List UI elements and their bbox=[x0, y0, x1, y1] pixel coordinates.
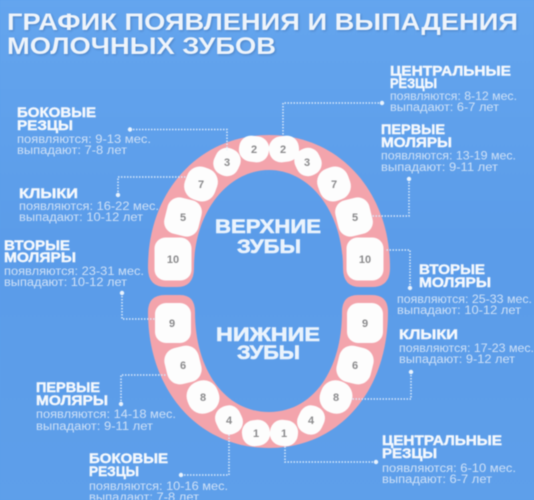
tooth numbers: 3 bbox=[224, 157, 230, 169]
tooth numbers: 6 bbox=[352, 360, 358, 372]
text block: upper lateral incisors: выпадают: 7-8 лет bbox=[17, 145, 128, 157]
text block: right second molars: ВТОРЫЕ bbox=[419, 262, 485, 277]
connector: lower second molars bbox=[120, 291, 155, 319]
text block: lower central incisors: выпадают: 6-7 лет bbox=[382, 474, 493, 486]
tooth numbers: 8 bbox=[200, 392, 206, 404]
label: upper teeth: ВЕРХНИЕ bbox=[215, 216, 321, 238]
text block: lower canines: появляются: 17-23 мес. bbox=[399, 343, 534, 355]
tooth numbers: 4 bbox=[226, 415, 233, 427]
text block: lower central incisors: ЦЕНТРАЛЬНЫЕ bbox=[382, 433, 502, 448]
title bbox=[7, 9, 518, 60]
tooth numbers: 4 bbox=[308, 415, 315, 427]
text block: upper central incisors: РЕЗЦЫ bbox=[390, 76, 437, 91]
tooth numbers: 9 bbox=[362, 318, 368, 330]
text block: upper first molars: ПЕРВЫЕ bbox=[381, 122, 445, 137]
upper gum bbox=[148, 135, 390, 287]
text block: lower lateral incisors: РЕЗЦЫ bbox=[89, 464, 139, 479]
tooth numbers: 7 bbox=[198, 179, 204, 191]
tooth numbers: 5 bbox=[180, 212, 186, 224]
tooth numbers: 7 bbox=[331, 179, 337, 191]
tooth numbers bbox=[167, 144, 371, 440]
text block: left second molars: выпадают: 10-12 лет bbox=[4, 277, 128, 289]
text block: lower central incisors bbox=[382, 433, 516, 486]
text block: upper first molars: МОЛЯРЫ bbox=[381, 135, 452, 150]
text block: lower first molars: МОЛЯРЫ bbox=[36, 393, 108, 408]
lower gum bbox=[148, 295, 388, 448]
upper teeth bbox=[154, 134, 384, 280]
connector: lower canines bbox=[352, 370, 413, 399]
tooth numbers: 1 bbox=[253, 428, 259, 440]
connector: lower first molars bbox=[119, 375, 167, 406]
text block: left second molars: появляются: 23-31 мес. bbox=[4, 266, 144, 278]
title: ГРАФИК ПОЯВЛЕНИЯ И ВЫПАДЕНИЯ bbox=[7, 9, 518, 36]
label: lower teeth: НИЖНИЕ bbox=[216, 324, 320, 346]
text block: lower first molars: появляются: 14-18 мес. bbox=[36, 409, 176, 421]
tooth numbers: 2 bbox=[280, 144, 286, 156]
label: upper teeth bbox=[215, 216, 321, 258]
text block: upper canines: выпадают: 10-12 лет bbox=[19, 212, 144, 224]
tooth numbers: 2 bbox=[251, 144, 257, 156]
tooth numbers: 9 bbox=[169, 318, 175, 330]
label: lower teeth bbox=[216, 324, 320, 364]
connector: lower lateral incisors bbox=[179, 434, 229, 477]
text block: upper lateral incisors bbox=[17, 105, 151, 157]
text block: upper first molars: появляются: 13-19 мес. bbox=[381, 150, 516, 162]
connector: upper central incisors bbox=[283, 101, 384, 135]
text block: left second molars: МОЛЯРЫ bbox=[4, 250, 76, 265]
text block: lower canines: выпадают: 9-12 лет bbox=[399, 354, 516, 366]
text block: lower first molars: ПЕРВЫЕ bbox=[36, 380, 100, 395]
text block: lower first molars bbox=[36, 380, 176, 433]
text block: lower lateral incisors: БОКОВЫЕ bbox=[89, 451, 168, 466]
connector: upper first molars bbox=[372, 177, 411, 216]
text block: lower central incisors: РЕЗЦЫ bbox=[382, 446, 437, 461]
text block: right second molars: выпадают: 10-12 лет bbox=[397, 305, 522, 317]
tooth numbers: 1 bbox=[281, 428, 287, 440]
label: upper teeth: ЗУБЫ bbox=[237, 236, 301, 258]
text block: upper canines bbox=[19, 186, 159, 224]
text block: lower lateral incisors: появляются: 10-16 мес. bbox=[89, 481, 228, 493]
text block: lower first molars: выпадают: 9-11 лет bbox=[36, 421, 154, 433]
text block: upper lateral incisors: РЕЗЦЫ bbox=[17, 118, 73, 133]
text block: right second molars: МОЛЯРЫ bbox=[419, 275, 491, 290]
tooth numbers: 8 bbox=[333, 392, 339, 404]
connector: upper lateral incisors bbox=[128, 127, 227, 150]
tooth numbers: 6 bbox=[180, 360, 186, 372]
tooth numbers: 3 bbox=[304, 157, 310, 169]
tooth numbers: 5 bbox=[352, 212, 358, 224]
connector: lower central incisors bbox=[285, 446, 378, 464]
title: МОЛОЧНЫХ ЗУБОВ bbox=[7, 33, 276, 60]
text block: upper first molars bbox=[381, 122, 516, 174]
text block: lower canines bbox=[399, 327, 534, 366]
text block: upper central incisors bbox=[390, 64, 517, 114]
text block: upper canines: КЛЫКИ bbox=[19, 186, 78, 201]
text block: upper central incisors: появляются: 8-12 мес. bbox=[390, 91, 517, 103]
text block: upper canines: появляются: 16-22 мес. bbox=[19, 201, 159, 213]
text block: left second molars: ВТОРЫЕ bbox=[4, 238, 70, 253]
label: lower teeth: ЗУБЫ bbox=[237, 342, 300, 364]
text block: lower central incisors: появляются: 6-10 мес. bbox=[382, 463, 516, 475]
text block: upper first molars: выпадают: 9-11 лет bbox=[381, 162, 499, 174]
text block: lower lateral incisors bbox=[89, 451, 228, 500]
connector: upper second molars bbox=[385, 250, 412, 290]
text block: right second molars bbox=[397, 262, 532, 317]
text block: upper lateral incisors: появляются: 9-13 мес. bbox=[17, 134, 151, 146]
text block: upper lateral incisors: БОКОВЫЕ bbox=[17, 105, 96, 120]
tooth numbers: 10 bbox=[167, 254, 179, 266]
connector: upper canines bbox=[116, 177, 186, 197]
text block: right second molars: появляются: 25-33 мес. bbox=[397, 294, 532, 306]
tooth numbers: 10 bbox=[359, 254, 371, 266]
text block: lower canines: КЛЫКИ bbox=[399, 327, 458, 342]
lower teeth bbox=[155, 303, 383, 448]
text block: upper central incisors: выпадают: 6-7 лет bbox=[390, 102, 500, 114]
text block: upper central incisors: ЦЕНТРАЛЬНЫЕ bbox=[390, 64, 511, 78]
text block: left second molars bbox=[4, 238, 144, 289]
